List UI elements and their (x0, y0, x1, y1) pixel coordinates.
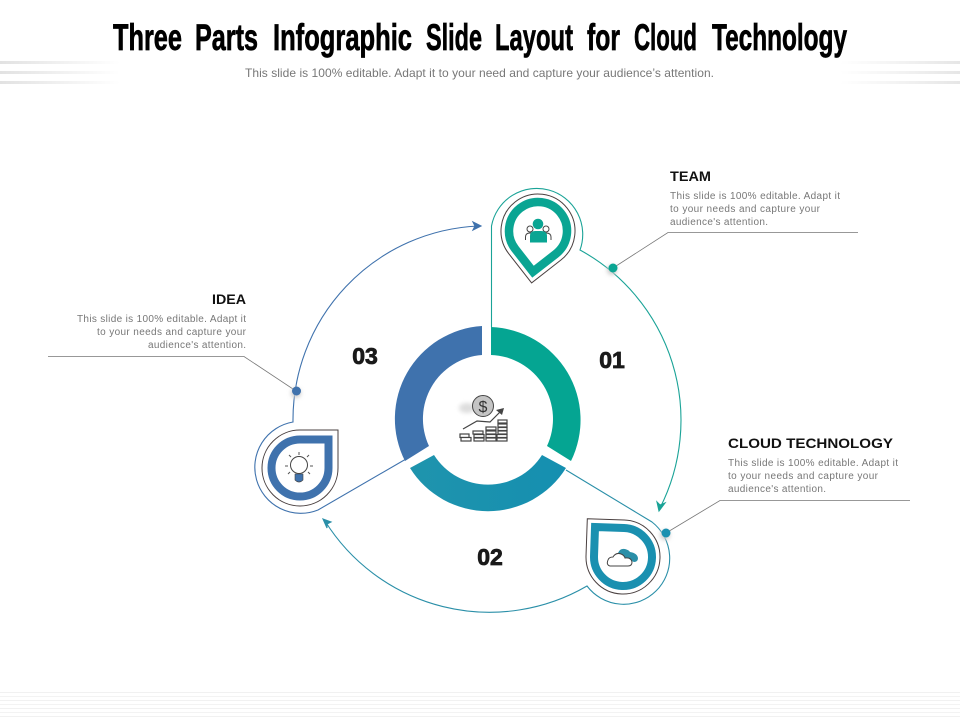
leader line and dot: idea (48, 356, 301, 398)
icon: cloud (607, 549, 638, 566)
number 03: 03 (352, 343, 378, 369)
text block: team: to your needs and capture your (670, 204, 821, 215)
ring segment 02 (410, 455, 566, 511)
title (113, 17, 847, 58)
text block: cloud technology: This slide is 100% editable. Adapt it (728, 458, 898, 469)
leader line and dot: cloud technology (660, 500, 910, 540)
text block: cloud technology (728, 435, 898, 495)
icon: team people (526, 219, 551, 242)
number 02: 02 (477, 544, 503, 570)
text block: cloud technology: audience's attention. (728, 484, 826, 495)
text block: cloud technology: to your needs and capture your (728, 471, 879, 482)
title: Infographic (273, 17, 412, 58)
title: Parts (195, 17, 258, 58)
text block: idea: This slide is 100% editable. Adapt it (77, 314, 246, 325)
text block: team (670, 168, 840, 228)
connector arrow: cloud technology to idea (323, 470, 670, 612)
text block: team: This slide is 100% editable. Adapt it (670, 191, 840, 202)
text block: team: audience's attention. (670, 217, 768, 228)
title: Technology (712, 17, 847, 58)
text block: idea: IDEA (212, 291, 246, 307)
leader line and dot: team (607, 232, 858, 275)
text block: idea: to your needs and capture your (97, 327, 247, 338)
subtitle: This slide is 100% editable. Adapt it to your need and capture your audience’s attention. (245, 66, 714, 80)
text block: team: TEAM (670, 168, 711, 184)
icon: light bulb (285, 452, 313, 482)
icon: money growth (459, 396, 507, 441)
title: Layout (495, 17, 573, 58)
connector arrow: idea to team (255, 222, 481, 513)
text block: idea: audience's attention. (148, 340, 246, 351)
pin: cloud technology (585, 519, 661, 595)
pin: idea (262, 430, 338, 506)
title: Cloud (634, 17, 697, 58)
title: Slide (426, 17, 482, 58)
title: Three (113, 17, 182, 58)
ring segment 01 (491, 327, 581, 461)
ring segment 03 (395, 326, 482, 461)
text block: idea (77, 291, 247, 351)
number 01: 01 (599, 347, 625, 373)
pin: team (486, 179, 590, 283)
text block: cloud technology: CLOUD TECHNOLOGY (728, 435, 894, 451)
title: for (587, 17, 620, 58)
donut ring chart (395, 326, 581, 511)
icon: money growth: $ (479, 399, 488, 416)
connector arrow: team to cloud technology (492, 188, 681, 511)
